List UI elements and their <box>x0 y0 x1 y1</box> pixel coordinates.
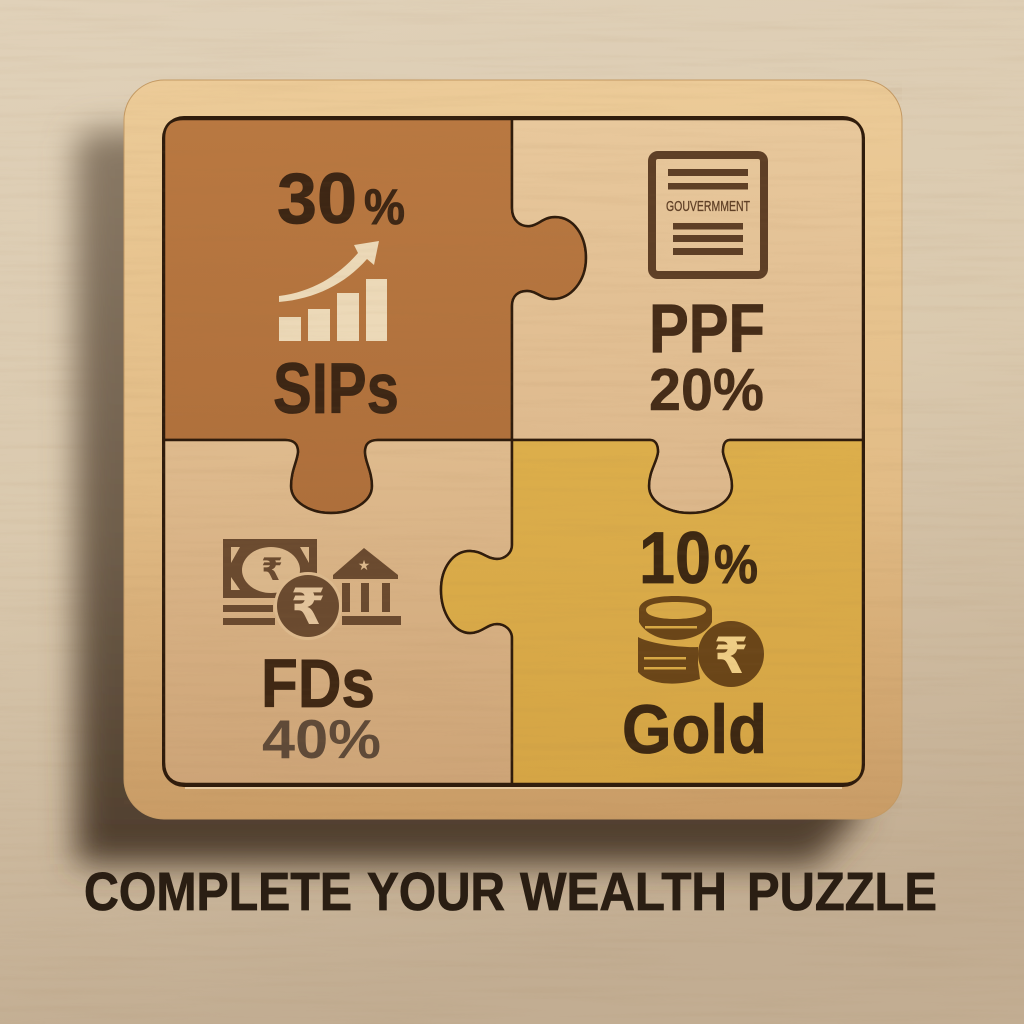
puzzle board frame <box>124 80 902 819</box>
PPF percentage: 20% <box>649 357 764 423</box>
icon: gold coin stack with rupee coin <box>638 596 764 687</box>
title: WEALTH <box>520 862 727 922</box>
panel: Gold piece <box>441 440 863 784</box>
title: YOUR <box>367 862 505 922</box>
title <box>84 862 937 922</box>
SIPs percentage: % <box>364 179 405 235</box>
icon: government document <box>652 155 764 275</box>
FDs label: FDs <box>261 645 375 722</box>
PPF label: PPF <box>649 290 765 367</box>
Gold percentage <box>639 518 758 599</box>
SIPs percentage: 30 <box>277 160 357 239</box>
frame drop shadow <box>76 130 860 864</box>
panel: FDs piece <box>164 440 512 784</box>
icon: banknote, rupee coin and bank: ★ <box>358 558 370 574</box>
wood grain on board <box>124 80 902 819</box>
Gold percentage: % <box>714 533 758 595</box>
icon: banknote, rupee coin and bank: ₹ <box>291 578 325 636</box>
panel: PPF piece <box>512 119 863 513</box>
FDs percentage: 40% <box>262 708 381 770</box>
icon: government document: GOUVERMMENT <box>666 198 750 215</box>
title: COMPLETE <box>84 862 352 922</box>
SIPs percentage <box>277 160 405 239</box>
icon: growth bars and arrow <box>279 241 387 341</box>
SIPs label: SIPs <box>273 350 399 429</box>
icon: banknote, rupee coin and bank <box>223 539 401 640</box>
icon: gold coin stack with rupee coin: ₹ <box>714 627 748 685</box>
Gold label: Gold <box>622 691 767 768</box>
title: PUZZLE <box>747 862 937 922</box>
panel: SIPs piece <box>164 119 586 513</box>
Gold percentage: 10 <box>639 518 711 599</box>
icon: banknote, rupee coin and bank: ₹ <box>261 552 283 588</box>
